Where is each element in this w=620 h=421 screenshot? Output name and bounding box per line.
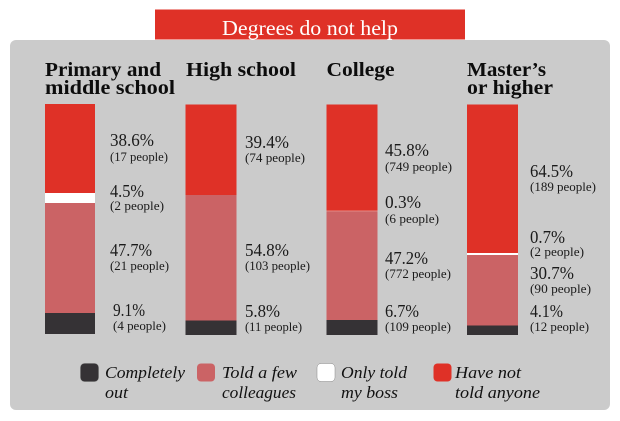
legend item: only told my boss: my boss [341, 383, 398, 402]
value: only told boss [385, 192, 439, 226]
value: have not told anyone: 64.5% [530, 161, 573, 181]
panel: college [326, 59, 452, 335]
value: told a few colleagues: 54.8% [245, 240, 289, 260]
value: completely out [245, 301, 302, 334]
stacked bar: primary and middle school [45, 104, 95, 334]
legend item: only told my boss: Only told [341, 363, 408, 382]
value: told a few colleagues: 47.7% [110, 240, 152, 260]
heading: primary and middle school: middle school [45, 77, 175, 99]
legend item: told a few colleagues: Told a few [222, 363, 298, 382]
value: told a few colleagues [245, 240, 310, 273]
stacked bar: high school [186, 104, 236, 335]
legend item: have not told anyone: told anyone [455, 383, 540, 402]
legend item: completely out [80, 363, 185, 402]
legend item: completely out: Completely [105, 363, 185, 382]
value: only told boss: 4.5% [110, 181, 144, 201]
legend item: told a few colleagues: colleagues [222, 383, 296, 402]
value: told a few colleagues: (90 people) [530, 281, 591, 296]
value: told a few colleagues: (103 people) [245, 258, 310, 273]
value: have not told anyone: (189 people) [530, 179, 596, 194]
value: told a few colleagues: 47.2% [385, 248, 428, 268]
stacked bar: college [326, 104, 378, 335]
value: told a few colleagues [110, 240, 169, 273]
value: told a few colleagues [385, 248, 451, 281]
heading: master's or higher: or higher [467, 77, 553, 99]
panel: high school [186, 59, 310, 335]
legend item: only told my boss [317, 363, 408, 402]
value: told a few colleagues: 30.7% [530, 263, 574, 283]
value: completely out: (109 people) [385, 319, 451, 334]
legend item: have not told anyone: Have not [454, 363, 522, 382]
value: have not told anyone [110, 130, 168, 164]
value: have not told anyone [530, 161, 596, 194]
value: only told boss: 0.7% [530, 227, 565, 247]
value: completely out: 9.1% [113, 300, 145, 320]
value: completely out [385, 301, 451, 334]
stacked bar: master's or higher [467, 104, 518, 335]
value: told a few colleagues [530, 263, 591, 296]
value: only told boss: 0.3% [385, 192, 421, 212]
legend item: completely out: out [105, 383, 129, 402]
panel: primary and middle school [45, 59, 175, 334]
value: completely out: (11 people) [245, 319, 302, 334]
legend item: have not told anyone [434, 363, 540, 402]
value: have not told anyone: 38.6% [110, 130, 154, 150]
value: completely out: (4 people) [113, 318, 166, 333]
value: completely out [113, 300, 166, 333]
title banner [155, 10, 465, 40]
legend [80, 363, 540, 402]
heading: college: College [326, 59, 395, 81]
value: only told boss: (2 people) [110, 198, 164, 213]
value: only told boss: (2 people) [530, 244, 584, 259]
value: completely out: 6.7% [385, 301, 419, 321]
title banner: Degrees do not help [222, 16, 398, 40]
value: have not told anyone: (17 people) [110, 149, 168, 164]
heading: high school: High school [186, 59, 296, 81]
value: have not told anyone: 39.4% [245, 132, 289, 152]
value: only told boss: (6 people) [385, 211, 439, 226]
value: have not told anyone: (74 people) [245, 150, 305, 165]
value: only told boss [110, 181, 164, 213]
value: completely out [530, 301, 589, 334]
value: told a few colleagues: (772 people) [385, 266, 451, 281]
value: have not told anyone [245, 132, 305, 165]
value: have not told anyone: (749 people) [385, 159, 452, 174]
value: have not told anyone [385, 140, 452, 174]
heading: primary and middle school: Primary and [45, 59, 161, 81]
legend item: told a few colleagues [197, 363, 298, 402]
value: only told boss [530, 227, 584, 259]
value: completely out: (12 people) [530, 319, 589, 334]
panel: master's or higher [467, 59, 596, 335]
value: have not told anyone: 45.8% [385, 140, 429, 160]
heading: master's or higher: Master’s [467, 59, 546, 81]
value: completely out: 4.1% [530, 301, 563, 321]
value: completely out: 5.8% [245, 301, 280, 321]
value: told a few colleagues: (21 people) [110, 258, 169, 273]
